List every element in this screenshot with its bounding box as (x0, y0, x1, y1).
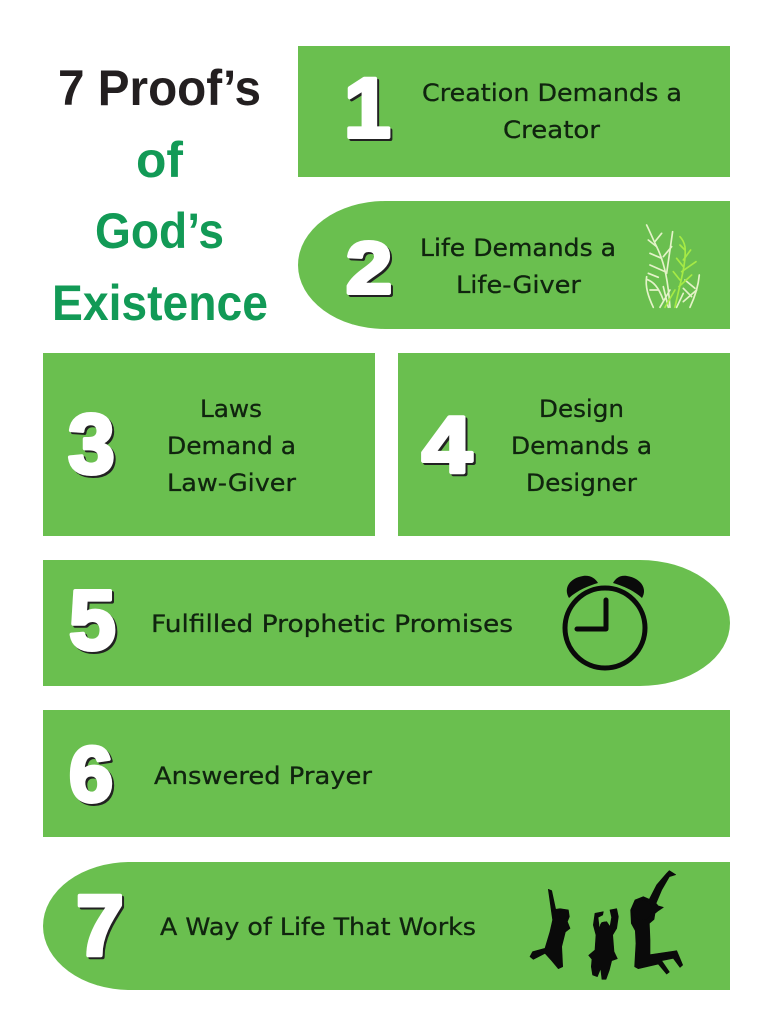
text: design demands a designer: Demands a (511, 432, 652, 460)
text: life demands a life-giver (420, 234, 616, 299)
text: design demands a designer: Design (539, 395, 624, 423)
panel 6: answered prayer (43, 710, 730, 837)
number 1: 1 (344, 61, 391, 155)
number 7: 7 (78, 880, 126, 976)
text: creation demands a creator: Creation Demands a (422, 79, 682, 107)
number 6: 6 (69, 730, 113, 818)
number 5: 5 (69, 573, 116, 667)
panel 7: way of life (43, 862, 730, 990)
number 3: 3 (70, 399, 117, 493)
number 7: 7 (76, 878, 124, 974)
text: laws demand a law-giver: Demand a (167, 432, 296, 460)
text: laws demand a law-giver: Law-Giver (167, 469, 296, 497)
number 4: 4 (422, 400, 473, 489)
text: creation demands a creator: Creator (503, 116, 600, 144)
icon: alarm clock (565, 576, 645, 668)
number 2: 2 (346, 228, 392, 309)
number 1: 1 (346, 63, 393, 157)
title (52, 60, 268, 331)
number 2: 2 (348, 230, 394, 311)
panel 3: laws (43, 353, 375, 536)
panel 5: prophetic promises (43, 560, 730, 686)
title: God’s (95, 203, 224, 259)
text: laws demand a law-giver: Laws (200, 395, 262, 423)
number 6: 6 (71, 732, 115, 820)
text: fulfilled prophetic promises: Fulfilled Prophetic Promises (151, 610, 513, 638)
text: a way of life that works: A Way of Life That Works (160, 913, 476, 941)
text: life demands a life-giver: Life Demands a (420, 234, 616, 262)
title: Existence (52, 275, 268, 331)
panel 1: creation (298, 46, 730, 177)
number 4: 4 (424, 402, 475, 491)
number 5: 5 (71, 575, 118, 669)
text: laws demand a law-giver (167, 395, 296, 497)
text: design demands a designer: Designer (526, 469, 637, 497)
panel 2: life (298, 201, 730, 329)
icon: jumping people (530, 871, 683, 979)
panel 4: design (398, 353, 730, 536)
title: of (136, 132, 183, 188)
text: answered prayer: Answered Prayer (154, 762, 372, 790)
text: life demands a life-giver: Life-Giver (456, 271, 581, 299)
icon: plant (646, 225, 699, 307)
text: creation demands a creator (422, 79, 682, 144)
text: design demands a designer (511, 395, 652, 497)
number 3: 3 (68, 397, 115, 491)
title: 7 Proof’s (58, 60, 261, 116)
